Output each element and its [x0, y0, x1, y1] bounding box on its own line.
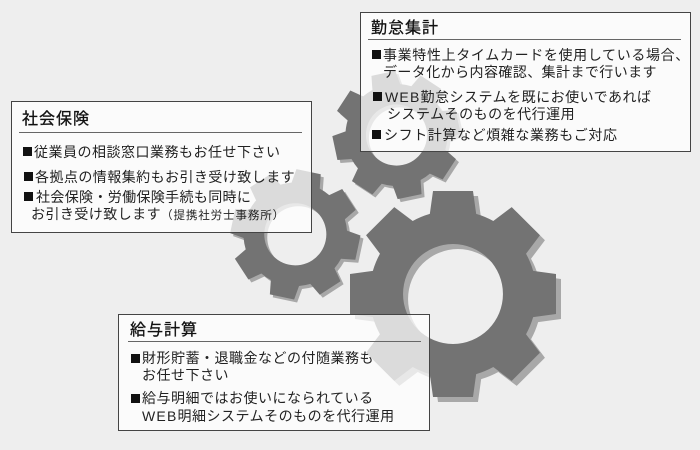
panel: 給与計算 — [118, 314, 430, 431]
panel: 社会保険 — [11, 101, 312, 233]
bullet: 社会保険手続 — [24, 192, 33, 201]
text: 給与明細: 給与明細ではお使いになられている — [142, 390, 374, 406]
text: 財形貯蓄: お任せ下さい — [142, 367, 229, 383]
text: 社会保険手続: 社会保険・労働保険手続も同時に — [36, 189, 251, 205]
heading: 勤怠集計: 勤怠集計 — [371, 20, 439, 37]
text: 財形貯蓄 — [142, 350, 374, 383]
bullet: 事業特性 — [372, 50, 381, 59]
bullet: シフト — [372, 130, 381, 139]
text: WEB勤怠: システムそのものを代行運用 — [387, 106, 575, 122]
text: 従業員: 従業員の相談窓口業務もお任せ下さい — [34, 144, 280, 160]
text: 提携社労士: お引き受け致します（提携社労士事務所） — [31, 206, 285, 222]
gear: large — [350, 191, 561, 402]
gear: middle — [219, 158, 374, 313]
bullet: WEB勤怠 — [373, 92, 382, 101]
bullet: 財形貯蓄 — [131, 354, 140, 363]
text: 事業特性 — [383, 47, 690, 80]
text: 給与明細 — [142, 390, 395, 424]
text: 各拠点: 各拠点の情報集約もお引き受け致します — [35, 169, 295, 185]
heading: 社会保険: 社会保険 — [22, 111, 90, 128]
gear: upper — [322, 60, 474, 213]
text: 給与明細: WEB明細システムそのものを代行運用 — [142, 408, 395, 424]
text: 事業特性: データ化から内容確認、集計まで行います — [383, 64, 657, 80]
text: 事業特性: 事業特性上タイムカードを使用している場合、 — [383, 47, 690, 63]
text: WEB勤怠: WEB勤怠システムを既にお使いであれば — [385, 89, 652, 105]
heading: 給与計算: 給与計算 — [130, 322, 198, 339]
text: 財形貯蓄: 財形貯蓄・退職金などの付随業務も — [142, 350, 374, 366]
text: シフト: シフト計算など煩雑な業務もご対応 — [384, 127, 618, 143]
text: WEB勤怠 — [385, 89, 652, 122]
panel: 勤怠集計 — [360, 12, 691, 152]
bullet: 各拠点 — [24, 172, 33, 181]
bullet: 給与明細 — [131, 394, 140, 403]
bullet: 従業員 — [23, 147, 32, 156]
